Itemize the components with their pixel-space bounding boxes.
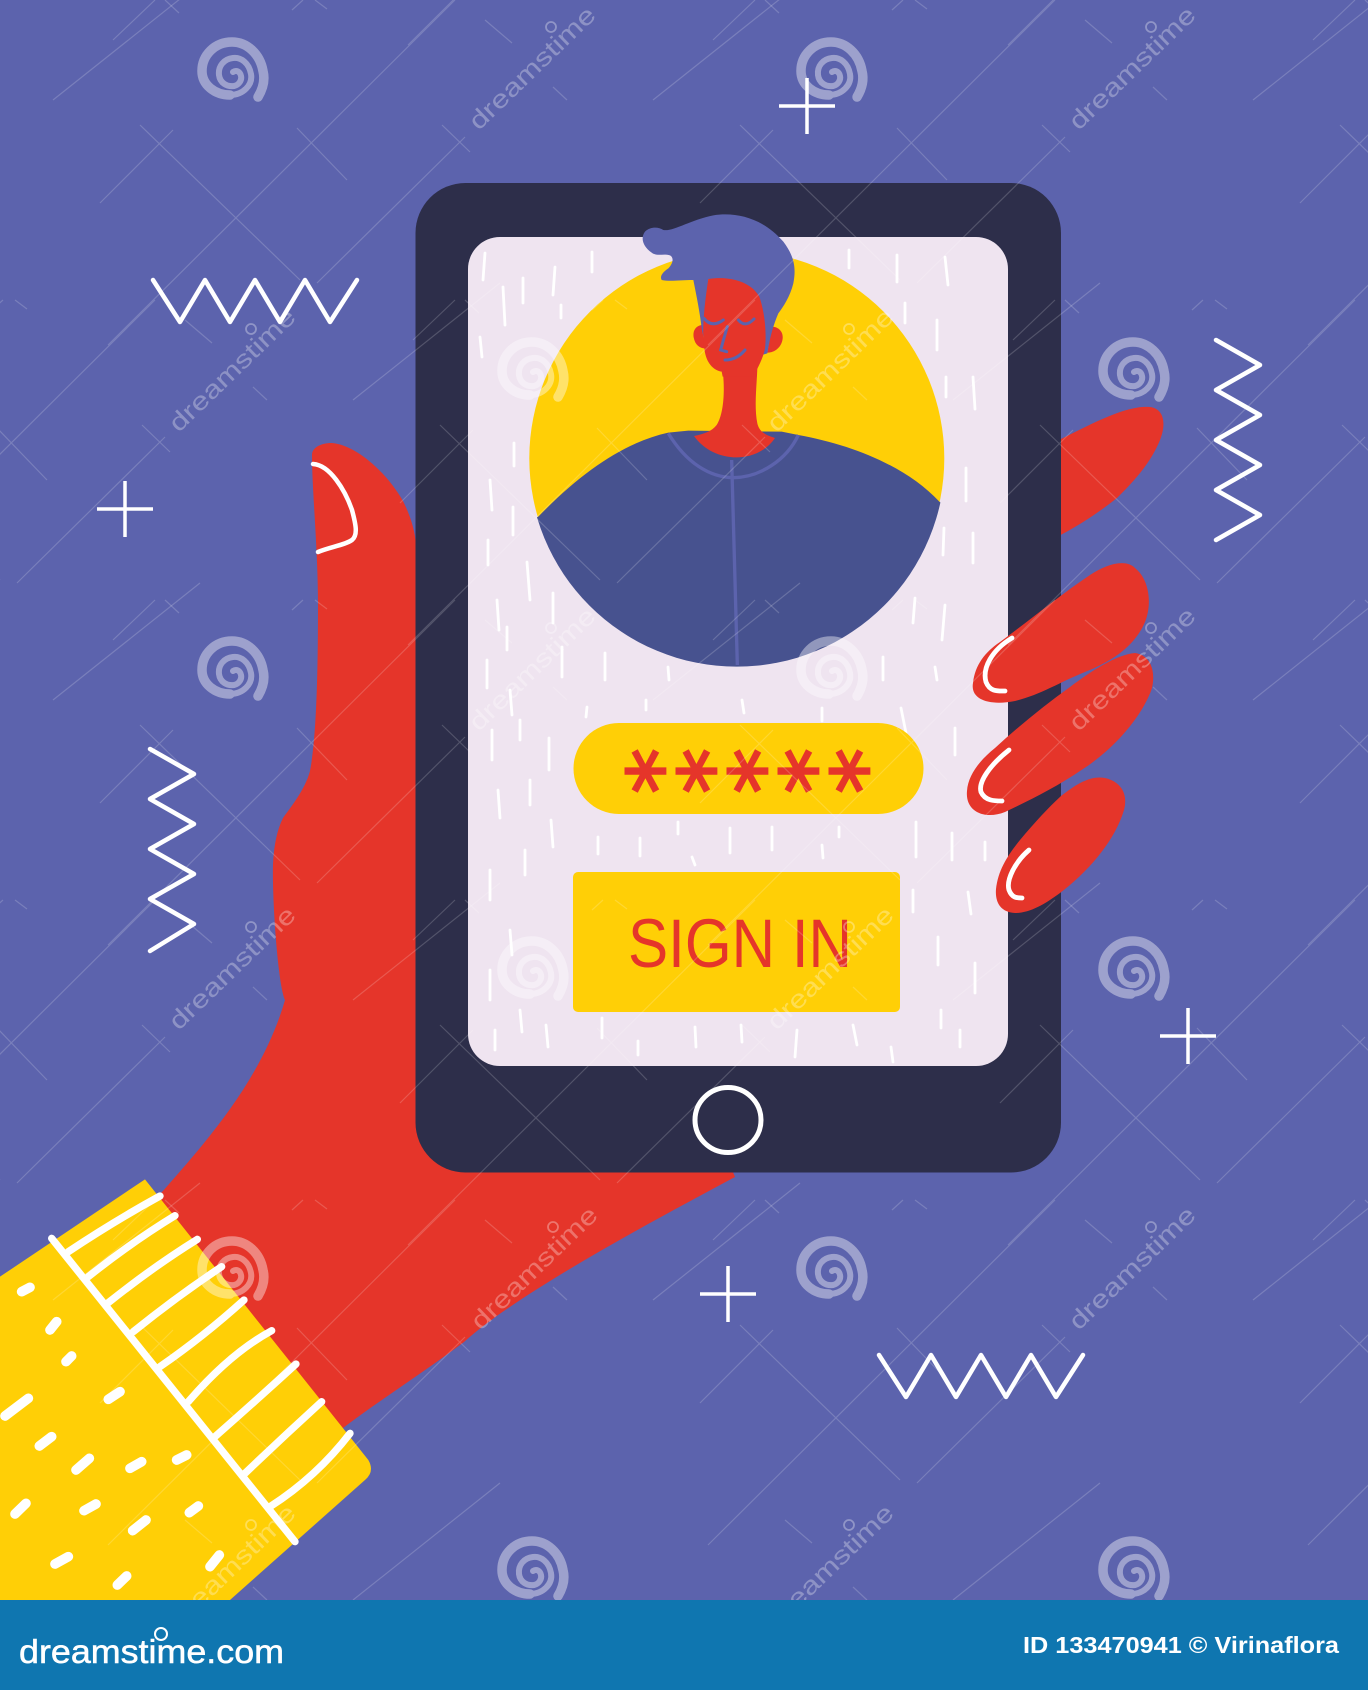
hair — [643, 214, 795, 357]
password asterisks — [578, 747, 886, 795]
sleeve body — [0, 1179, 371, 1600]
watermark rings — [246, 22, 1156, 1530]
watermark text: dreamstime — [463, 1, 602, 136]
watermark text: dreamstime — [1063, 1201, 1202, 1336]
user avatar — [529, 214, 944, 667]
finger nails — [981, 638, 1029, 898]
finger behind phone — [1055, 407, 1163, 538]
shirt — [537, 430, 940, 667]
watermark text: dreamstime — [1063, 1, 1202, 136]
password asterisks: * — [578, 747, 682, 795]
password asterisks: * — [628, 747, 734, 795]
watermark text: dreamstime — [163, 901, 302, 1036]
footer band — [0, 1600, 1368, 1690]
zigzag: top left — [153, 280, 357, 322]
sleeve dashes — [5, 1287, 219, 1585]
finger four — [996, 777, 1125, 913]
front fingers — [967, 563, 1153, 913]
watermark text: dreamstime — [163, 1499, 302, 1634]
facial features — [704, 318, 754, 360]
footer logo text: dreamstime.com — [19, 1633, 284, 1670]
watermark text: dreamstime — [761, 1499, 900, 1634]
button shape — [573, 872, 900, 1012]
sweater sleeve — [0, 1179, 371, 1600]
decorative zigzags and plus signs — [97, 78, 1260, 1397]
screen texture dashes — [480, 250, 985, 1062]
home button — [695, 1088, 761, 1152]
watermark text: dreamstime — [761, 901, 900, 1036]
button label: SIGN IN — [628, 905, 852, 982]
footer id and credit: ID 133470941 © Virinaflora — [1023, 1632, 1339, 1658]
phone screen — [468, 237, 1008, 1066]
thumb nail — [313, 464, 356, 552]
footer background — [0, 1600, 1368, 1690]
zigzag: right vertical — [1216, 340, 1260, 540]
ears — [693, 325, 783, 353]
password asterisks: * — [782, 747, 886, 795]
neck — [694, 368, 775, 457]
footer logo spiral — [155, 1628, 167, 1640]
zigzag: left vertical — [150, 749, 194, 951]
password pill — [574, 723, 924, 814]
sleeve ribs — [52, 1196, 350, 1542]
watermark spirals — [202, 42, 1165, 1596]
password field — [574, 723, 924, 814]
plus signs — [97, 78, 1216, 1322]
finger three — [967, 653, 1153, 815]
watermark text: dreamstime — [465, 1201, 604, 1336]
watermark text: dreamstime — [1063, 602, 1202, 737]
finger two — [973, 563, 1149, 703]
watermark text: dreamstime — [761, 303, 900, 438]
zigzag: bottom right — [879, 1355, 1083, 1397]
watermark text — [163, 1, 1202, 1634]
avatar yellow circle — [529, 251, 944, 666]
password asterisks: * — [730, 747, 836, 795]
face — [703, 278, 766, 377]
watermark text: dreamstime — [163, 303, 302, 438]
avatar figure — [500, 214, 983, 700]
password asterisks: * — [680, 747, 784, 795]
shirt collar and seam — [668, 433, 798, 665]
sign in button — [573, 872, 900, 1012]
phone — [416, 183, 1061, 1172]
phone body — [416, 183, 1061, 1172]
hand — [140, 407, 1163, 1445]
palm and thumb — [140, 443, 735, 1445]
watermark text: dreamstime — [463, 602, 602, 737]
